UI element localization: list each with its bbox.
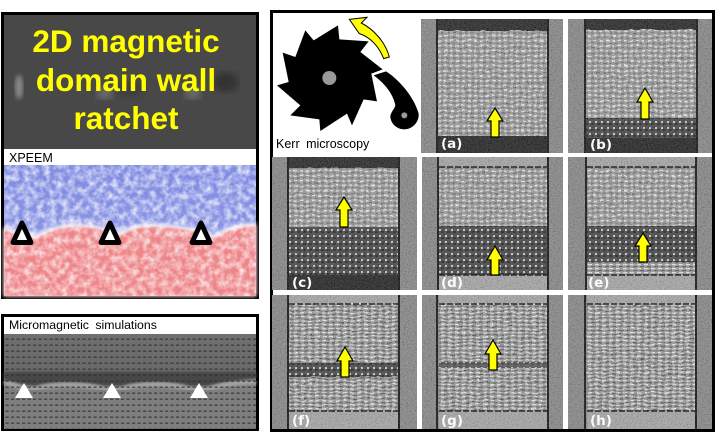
- frame f: [272, 295, 417, 429]
- panel: XPEEM and title: [2, 14, 258, 298]
- label: (c): [292, 275, 312, 291]
- panel: micromagnetic simulations: [2, 316, 258, 430]
- XPEEM domain image: [4, 165, 256, 296]
- title: 2D magnetic: [32, 23, 220, 59]
- label: (b): [590, 137, 612, 153]
- label: (d): [441, 275, 463, 291]
- panel: Kerr microscopy: [272, 12, 714, 430]
- label: (a): [441, 136, 462, 152]
- frame d: [422, 157, 563, 291]
- background micrograph: [4, 15, 256, 149]
- label: (e): [588, 275, 610, 291]
- arrow: [637, 88, 653, 119]
- label: (g): [441, 413, 463, 429]
- arrow: [635, 233, 651, 262]
- arrow: [487, 108, 503, 137]
- title: domain wall: [36, 62, 216, 98]
- label: Kerr microscopy: Kerr microscopy: [276, 137, 370, 151]
- simulation map: [4, 334, 256, 429]
- arrow: [487, 246, 503, 275]
- frame c: [272, 157, 417, 291]
- white triangle markers: [15, 383, 208, 398]
- arrow: [337, 347, 353, 377]
- title: ratchet: [73, 100, 179, 136]
- frame h: [568, 295, 712, 429]
- label: Micromagnetic simulations: Micromagnetic simulations: [9, 318, 157, 332]
- icon: pawl: [374, 71, 419, 129]
- frame e: [568, 157, 712, 291]
- arrow: [336, 197, 352, 227]
- label: (f): [292, 413, 310, 429]
- frame g: [422, 295, 563, 429]
- arrow: [485, 340, 501, 370]
- arrow: rotation direction: [349, 17, 389, 59]
- label: (h): [590, 413, 612, 429]
- triangle markers: [13, 223, 210, 242]
- icon: ratchet wheel: [277, 17, 419, 131]
- label: XPEEM: XPEEM: [9, 151, 53, 165]
- frame a: [421, 19, 563, 153]
- frame b: [568, 19, 712, 153]
